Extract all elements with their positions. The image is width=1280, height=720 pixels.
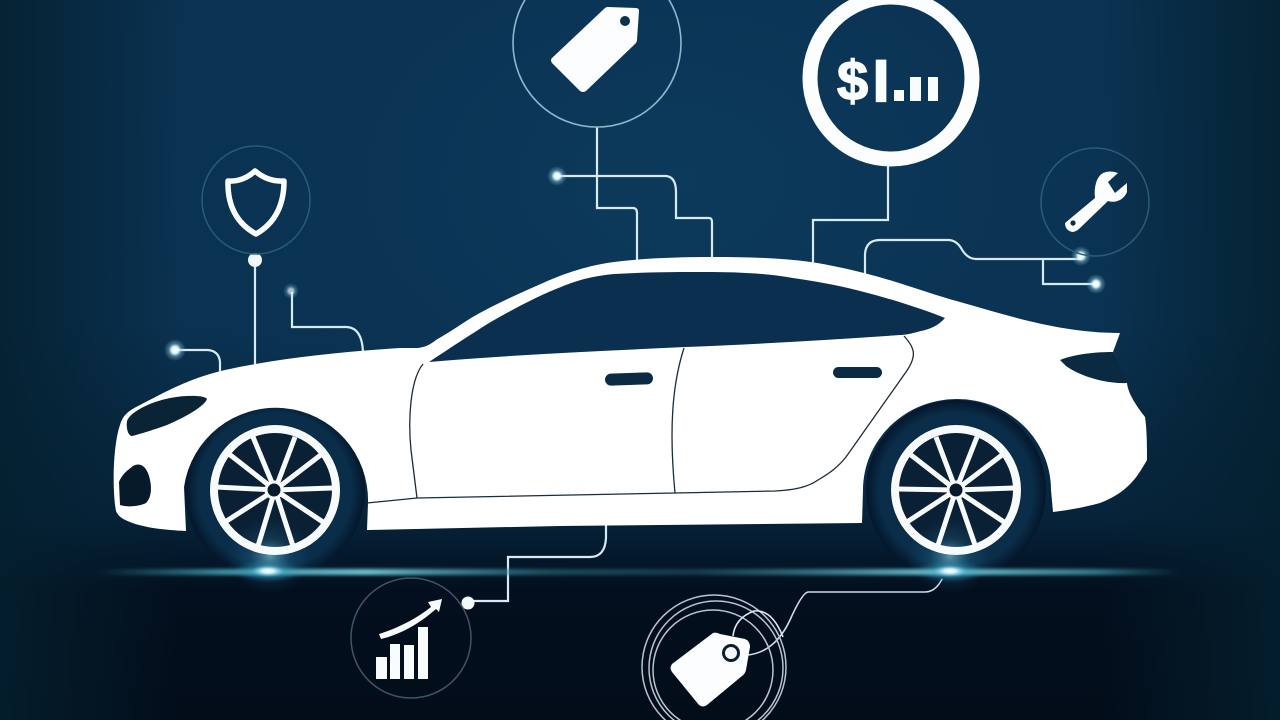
rear wheel: [866, 400, 1046, 594]
front air intake: [119, 464, 151, 506]
circuit line: hood lower: [164, 339, 220, 375]
body silhouette: [114, 257, 1147, 531]
tail light: [1060, 352, 1127, 383]
circuit line: rear wheel to tag string: [748, 572, 945, 655]
badge dollar sign: $: [837, 49, 868, 112]
circuit line: underbody to chart: [462, 524, 606, 610]
front wheel glow: [228, 518, 312, 594]
circuit line: price tag to roof: [597, 127, 637, 262]
icon: cost badge: [810, 0, 972, 159]
icon: wrench: [1041, 148, 1149, 256]
front spokes: [216, 437, 332, 546]
car body: [114, 257, 1147, 531]
headlight: [127, 396, 207, 436]
circuit line: wrench to rear roof: [865, 240, 1106, 294]
front wheel: [185, 400, 365, 594]
road flare: rear: [916, 559, 984, 583]
badge letter: I: [873, 49, 889, 114]
rear wheel glow: [908, 518, 992, 594]
road flare: front: [234, 559, 302, 583]
windows: [429, 272, 945, 362]
circuit line: shield to hood: [248, 253, 262, 364]
light beam on road: [95, 569, 1180, 575]
door handles: [605, 367, 882, 386]
circuit node: shield: [248, 253, 262, 267]
circuit line: stepped to roof: [547, 166, 712, 260]
circuit line: hood upper: [283, 283, 363, 352]
circuit line: cost badge to roof: [813, 165, 888, 265]
badge bars: [894, 77, 938, 101]
icon: growth chart: [351, 578, 471, 698]
icon: shield: [202, 146, 310, 254]
icon: price tag in circle: [513, 0, 681, 127]
icon: tag with string: [642, 595, 786, 720]
door seams: [367, 336, 913, 503]
rear spokes: [898, 437, 1014, 545]
